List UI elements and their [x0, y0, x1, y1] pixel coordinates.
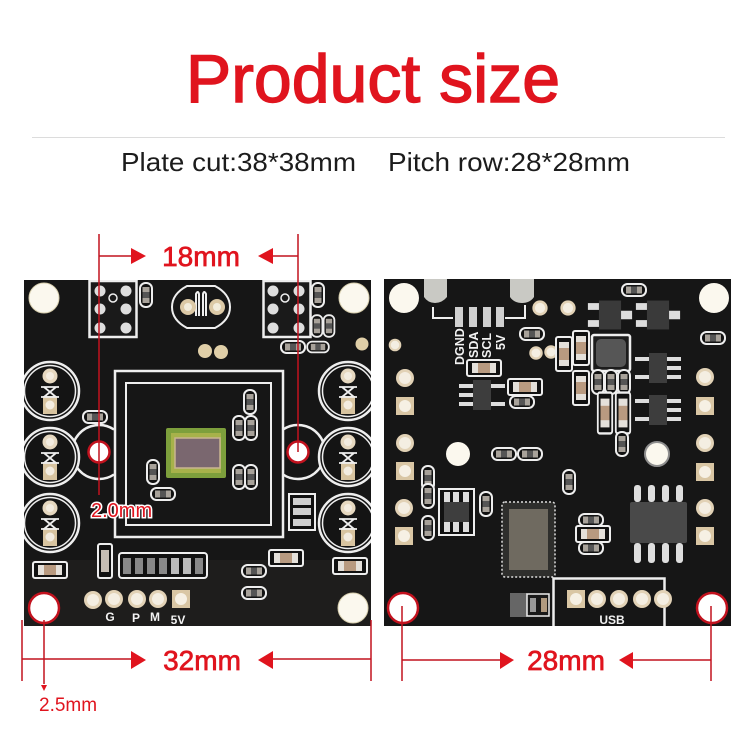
small parts cluster — [576, 514, 610, 554]
SOIC chip — [630, 485, 687, 563]
rotated pin labels — [455, 328, 505, 364]
pad labels: 5V — [171, 613, 185, 627]
edge pads — [395, 368, 714, 545]
subtitle: plate cut and pitch row: Pitch row:28*28mm — [388, 147, 630, 177]
capacitor footprints — [21, 362, 377, 552]
dimension: 2.5mm edge offset — [39, 620, 97, 716]
header footprint left — [90, 281, 136, 337]
header footprint right — [264, 281, 310, 337]
dimension: 28mm — [402, 606, 711, 681]
dimension: 28mm: 28mm — [527, 645, 605, 676]
resistor block right — [289, 494, 315, 530]
small surface-mount parts top — [83, 283, 334, 423]
connector bracket and pads — [433, 305, 525, 327]
dimension: 32mm — [22, 620, 371, 681]
dimension: 18mm: 18mm — [162, 241, 240, 272]
sensor frame — [115, 371, 283, 537]
small resistors upper right — [422, 284, 725, 540]
regulator chips — [459, 301, 681, 425]
silver sensor tabs — [424, 279, 534, 303]
large QFN module — [502, 502, 555, 577]
rotated pin labels: DGND — [453, 328, 467, 365]
left board: sensor side PCB — [21, 280, 377, 627]
eight-pin chip with box — [439, 489, 474, 535]
components bottom row — [33, 544, 367, 599]
pad labels: G — [105, 610, 115, 624]
subtitle: plate cut and pitch row — [121, 147, 630, 177]
dimension: 18mm — [99, 234, 298, 495]
rotated pin labels: 5V — [494, 334, 508, 350]
right board: connector side PCB — [384, 279, 731, 628]
resistors around sensor — [147, 390, 257, 500]
sensor chip — [166, 428, 226, 478]
oval jumper footprint — [172, 286, 230, 328]
dimension: 2.5mm edge offset: 2.5mm — [39, 695, 97, 716]
dimension: 32mm: 32mm — [163, 645, 241, 676]
square inductor chip — [592, 335, 630, 371]
USB connector box: USB — [599, 613, 625, 627]
small chip lower — [510, 593, 549, 617]
hole rings — [72, 425, 325, 479]
gold vias — [389, 300, 576, 360]
title: Product size — [186, 41, 560, 117]
pad labels: P — [132, 611, 140, 625]
dimension: 2.0mm hole: 2.0mm — [91, 500, 152, 522]
USB connector box — [554, 578, 672, 628]
pad labels: M — [150, 610, 160, 624]
vias — [198, 338, 368, 359]
connector pads — [84, 590, 190, 609]
subtitle: plate cut and pitch row: Plate cut:38*38mm — [121, 147, 356, 177]
highlighted holes — [29, 442, 727, 623]
pad labels — [106, 612, 186, 624]
rotated pin labels: SCL — [480, 333, 494, 358]
mounting holes — [29, 283, 369, 623]
rotated pin labels: SDA — [467, 332, 481, 358]
mounting holes — [389, 283, 729, 466]
